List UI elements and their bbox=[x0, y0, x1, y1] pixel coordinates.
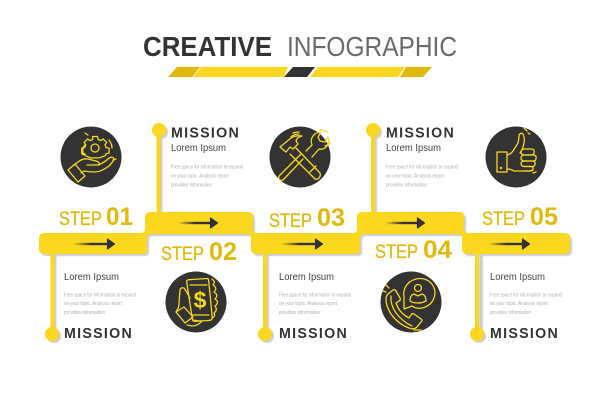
step 1 label: 01 bbox=[106, 203, 133, 231]
text block: step 3 mission: Free space for information to expand bbox=[279, 292, 351, 298]
connector lines and dots shadow bbox=[47, 125, 486, 343]
text block: step 5 mission: MISSION bbox=[490, 326, 559, 342]
icon: crossed hammer and wrench bbox=[270, 126, 330, 188]
title: INFOGRAPHIC bbox=[287, 31, 457, 62]
text block: step 1 mission: Lorem Ipsum bbox=[64, 271, 119, 283]
arrow 4 bbox=[385, 218, 424, 228]
text block: step 3 mission bbox=[279, 271, 351, 342]
step 4 label: 04 bbox=[423, 236, 452, 264]
step 3 label bbox=[269, 204, 345, 232]
step 3 label: 03 bbox=[317, 204, 345, 232]
icon: telephone with person bubble bbox=[380, 272, 442, 332]
step 2 connector and dot bbox=[152, 123, 166, 214]
step 2 label: 02 bbox=[209, 238, 237, 266]
stepped timeline band bbox=[39, 212, 570, 254]
text block: step 3 mission: MISSION bbox=[279, 326, 348, 342]
text block: step 3 mission: provides information bbox=[279, 310, 320, 316]
text block: step 4 mission: Lorem Ipsum bbox=[386, 142, 441, 154]
step 1 label: STEP bbox=[59, 208, 102, 230]
text block: step 3 mission: on your topic. Analysis report bbox=[279, 301, 338, 307]
arrow 5 bbox=[488, 239, 530, 249]
icon: hand holding phone with dollar: $ bbox=[194, 287, 207, 313]
text block: step 1 mission bbox=[64, 271, 136, 342]
icon: hand holding phone with dollar bbox=[166, 272, 226, 332]
text block: step 4 mission: MISSION bbox=[386, 126, 455, 142]
step 5 label bbox=[482, 203, 558, 231]
text block: step 1 mission: provides information bbox=[64, 310, 105, 316]
step 4 label: STEP bbox=[375, 241, 418, 263]
text block: step 5 mission: Free space for information to expand bbox=[490, 292, 562, 298]
text block: step 2 mission bbox=[171, 126, 243, 188]
text block: step 2 mission: Lorem Ipsum bbox=[171, 142, 226, 154]
text block: step 1 mission: Free space for information to expand bbox=[64, 292, 136, 298]
step 3 connector and dot bbox=[258, 252, 272, 341]
text block: step 5 mission: provides information bbox=[490, 310, 531, 316]
step 4 label bbox=[375, 236, 452, 264]
title bbox=[143, 31, 457, 62]
step 1 connector and dot bbox=[45, 252, 59, 341]
text block: step 4 mission: on your topic. Analysis report bbox=[386, 174, 445, 180]
step 5 label: 05 bbox=[530, 203, 558, 231]
text block: step 2 mission: Free space for information to expand bbox=[171, 164, 243, 170]
step 2 label bbox=[161, 238, 237, 266]
text block: step 1 mission: on your topic. Analysis report bbox=[64, 301, 123, 307]
title: CREATIVE bbox=[143, 31, 272, 62]
text block: step 1 mission: MISSION bbox=[64, 326, 133, 342]
text block: step 5 mission bbox=[490, 271, 562, 342]
step 5 label: STEP bbox=[482, 208, 525, 230]
text block: step 2 mission: MISSION bbox=[171, 126, 240, 142]
step 3 label: STEP bbox=[269, 210, 312, 232]
text block: step 2 mission: provides information bbox=[171, 182, 212, 188]
title underline bar bbox=[168, 67, 432, 77]
icon: thumbs up bbox=[486, 126, 546, 188]
arrow 1 bbox=[73, 239, 114, 249]
text block: step 4 mission: provides information bbox=[386, 182, 427, 188]
text block: step 3 mission: Lorem Ipsum bbox=[279, 271, 334, 283]
stepped band shadow bbox=[41, 214, 572, 256]
text block: step 5 mission: Lorem Ipsum bbox=[490, 271, 545, 283]
text block: step 5 mission: on your topic. Analysis report bbox=[490, 301, 549, 307]
step 1 label bbox=[59, 203, 133, 231]
arrow 2 bbox=[178, 218, 218, 228]
step 5 connector and dot bbox=[470, 252, 484, 341]
step 4 connector and dot bbox=[366, 123, 380, 214]
text block: step 4 mission: Free space for information to expand bbox=[386, 164, 458, 170]
step 2 label: STEP bbox=[161, 243, 204, 265]
arrow 3 bbox=[281, 239, 322, 249]
icon: gear in hand bbox=[60, 126, 122, 188]
text block: step 4 mission bbox=[386, 126, 458, 188]
text block: step 2 mission: on your topic. Analysis report bbox=[171, 174, 230, 180]
